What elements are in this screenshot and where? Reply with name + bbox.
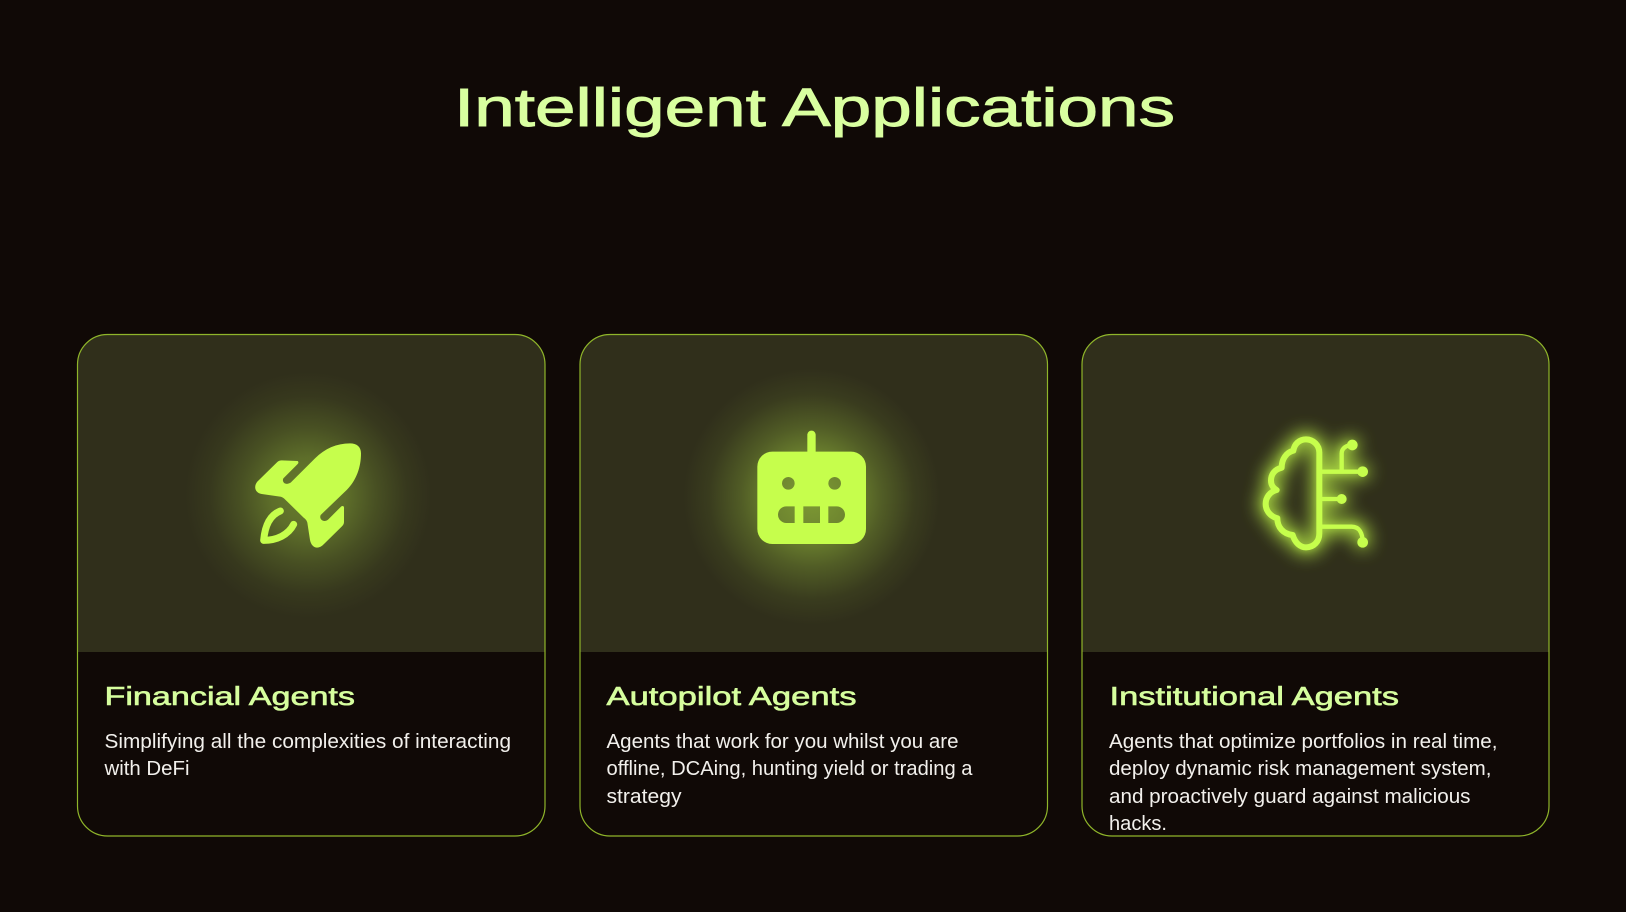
card border xyxy=(580,334,1048,836)
card description: deploy dynamic risk management system, xyxy=(1109,757,1492,780)
card description: Simplifying all the complexities of interacting xyxy=(104,730,511,753)
card image area xyxy=(78,334,545,652)
card description: hacks. xyxy=(1109,812,1167,835)
card description xyxy=(1109,730,1498,835)
card image area xyxy=(1082,334,1549,652)
card description: with DeFi xyxy=(104,757,190,780)
card heading: Financial Agents xyxy=(104,681,355,711)
card description: and proactively guard against malicious xyxy=(1109,785,1470,808)
card description: Agents that work for you whilst you are xyxy=(606,730,958,753)
icon: robot xyxy=(683,368,940,625)
panel: Autopilot Agents card xyxy=(580,334,1048,836)
card description: strategy xyxy=(606,785,682,808)
icon: brain circuit xyxy=(1266,439,1368,548)
card heading: Autopilot Agents xyxy=(606,681,856,711)
card description xyxy=(104,730,511,780)
card description: offline, DCAing, hunting yield or trading a xyxy=(606,757,973,780)
card heading: Institutional Agents xyxy=(1110,681,1399,711)
icon: rocket xyxy=(185,372,432,618)
title: Intelligent Applications xyxy=(454,78,1175,138)
card border xyxy=(1082,334,1549,836)
panel: Institutional Agents card xyxy=(1082,334,1549,836)
card border xyxy=(78,334,545,836)
panel: Financial Agents card xyxy=(78,334,545,836)
card description xyxy=(606,730,973,808)
card description: Agents that optimize portfolios in real time, xyxy=(1109,730,1498,753)
card image area xyxy=(580,334,1048,652)
